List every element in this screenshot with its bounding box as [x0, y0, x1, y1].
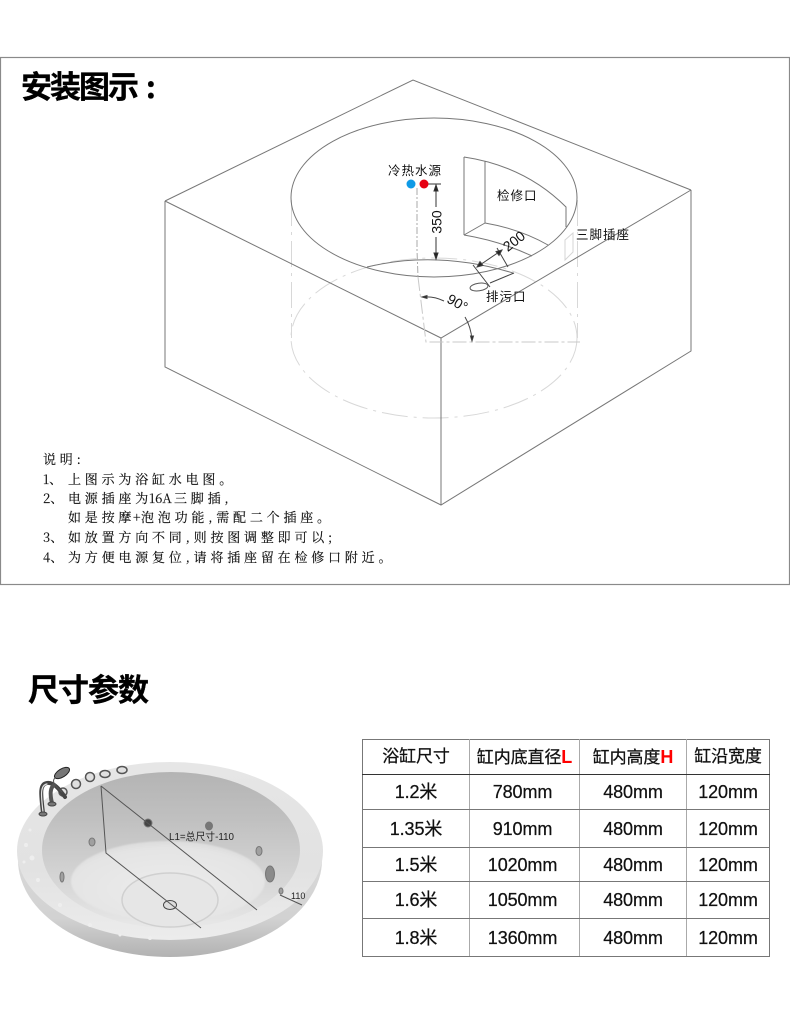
heading: installation diagram: : — [146, 63, 154, 107]
dimension 200 line — [473, 248, 514, 287]
icon: cold water dot — [406, 180, 416, 188]
dimension: 90 degrees: 90° — [444, 290, 471, 315]
faucet — [39, 765, 71, 816]
socket outline — [565, 233, 573, 260]
table: size parameters: 缸内底直径L — [477, 746, 572, 766]
dimension: 200: 200 — [500, 227, 528, 255]
label: L1: L1=总尺寸-110 — [169, 830, 234, 843]
note 4: 为方便电源复位,请将插座留在检修口附近。 — [68, 547, 395, 566]
dimension: 350: 350 — [428, 210, 444, 234]
table: size parameters: 1.5米 — [395, 854, 437, 874]
table: size parameters: 1.2米 — [395, 782, 437, 802]
diagram: tub enclosure — [165, 80, 691, 505]
tub bowl — [42, 772, 300, 928]
table: size parameters: 1.8米 — [395, 928, 437, 948]
table: size parameters: 1020mm — [488, 854, 557, 874]
tub body — [17, 762, 323, 957]
label: 110: 110 — [291, 891, 305, 901]
table: size parameters — [362, 739, 770, 957]
table: size parameters: 120mm — [698, 890, 758, 910]
hidden tub outline — [291, 200, 578, 418]
measure lines — [101, 786, 302, 928]
table: size parameters: 480mm — [603, 854, 663, 874]
table: size parameters: 浴缸尺寸 — [382, 747, 450, 766]
label: water source: 冷热水源 — [388, 164, 442, 178]
table: size parameters: 120mm — [698, 782, 758, 802]
jets — [60, 819, 283, 910]
access opening — [464, 157, 566, 256]
icon: hot water dot — [420, 180, 428, 188]
heading: dimensions: 尺寸参数 — [28, 665, 149, 710]
tub opening — [291, 118, 577, 277]
table: size parameters: 480mm — [603, 928, 663, 948]
table: size parameters: 480mm — [603, 818, 663, 838]
table: size parameters: 1.6米 — [395, 890, 437, 910]
table: size parameters: 缸沿宽度 — [694, 747, 762, 766]
table: size parameters: 120mm — [698, 818, 758, 838]
table: size parameters: 120mm — [698, 854, 758, 874]
note heading: 说明: — [43, 449, 85, 468]
tub floor — [71, 841, 265, 921]
note 1: 上图示为浴缸水电图。 — [68, 469, 236, 488]
note 4: 4、 — [43, 547, 63, 566]
label: socket: 三脚插座 — [576, 227, 630, 242]
note 3: 3、 — [43, 527, 63, 546]
note 1: 1、 — [43, 469, 62, 488]
table: size parameters: 480mm — [603, 890, 663, 910]
drain — [470, 282, 488, 292]
note 2 continued: 泡泡功能,需配二个插座。 — [141, 507, 334, 526]
control knobs — [59, 766, 127, 796]
tub skirt — [18, 763, 322, 957]
centre lines — [417, 188, 580, 342]
note 2: 2、 — [43, 488, 63, 507]
table: size parameters: 1050mm — [488, 890, 557, 910]
table: size parameters: 780mm — [493, 782, 552, 802]
rim speckles — [22, 828, 152, 940]
table: size parameters: 1360mm — [488, 928, 557, 948]
note 2 continued: 如是按摩 — [68, 507, 135, 526]
note 2: 三脚插, — [174, 488, 232, 507]
note 2: 16A — [149, 488, 172, 507]
label: access panel: 检修口 — [497, 188, 538, 203]
table: size parameters: 480mm — [603, 782, 663, 802]
illustration: round bathtub — [17, 762, 323, 957]
notes — [43, 449, 395, 566]
note 2 continued: + — [133, 507, 141, 526]
dimension 350 line — [428, 184, 441, 259]
tub floor arc — [367, 260, 513, 273]
note 2: 电源插座为 — [68, 488, 152, 507]
table: size parameters: 910mm — [493, 818, 552, 838]
table: size parameters: 120mm — [698, 928, 758, 948]
table: size parameters: 缸内高度H — [593, 746, 673, 766]
table: size parameters: 1.35米 — [390, 818, 442, 838]
heading: installation diagram: 安装图示 — [21, 62, 137, 107]
box edges — [165, 80, 691, 505]
note 3: 如放置方向不同,则按图调整即可以; — [68, 527, 336, 546]
label: drain: 排污口 — [486, 290, 527, 304]
panel: installation frame — [0, 58, 790, 584]
tub rim — [17, 762, 323, 940]
floor inner ring — [122, 873, 218, 927]
angle 90 arcs — [422, 296, 474, 341]
